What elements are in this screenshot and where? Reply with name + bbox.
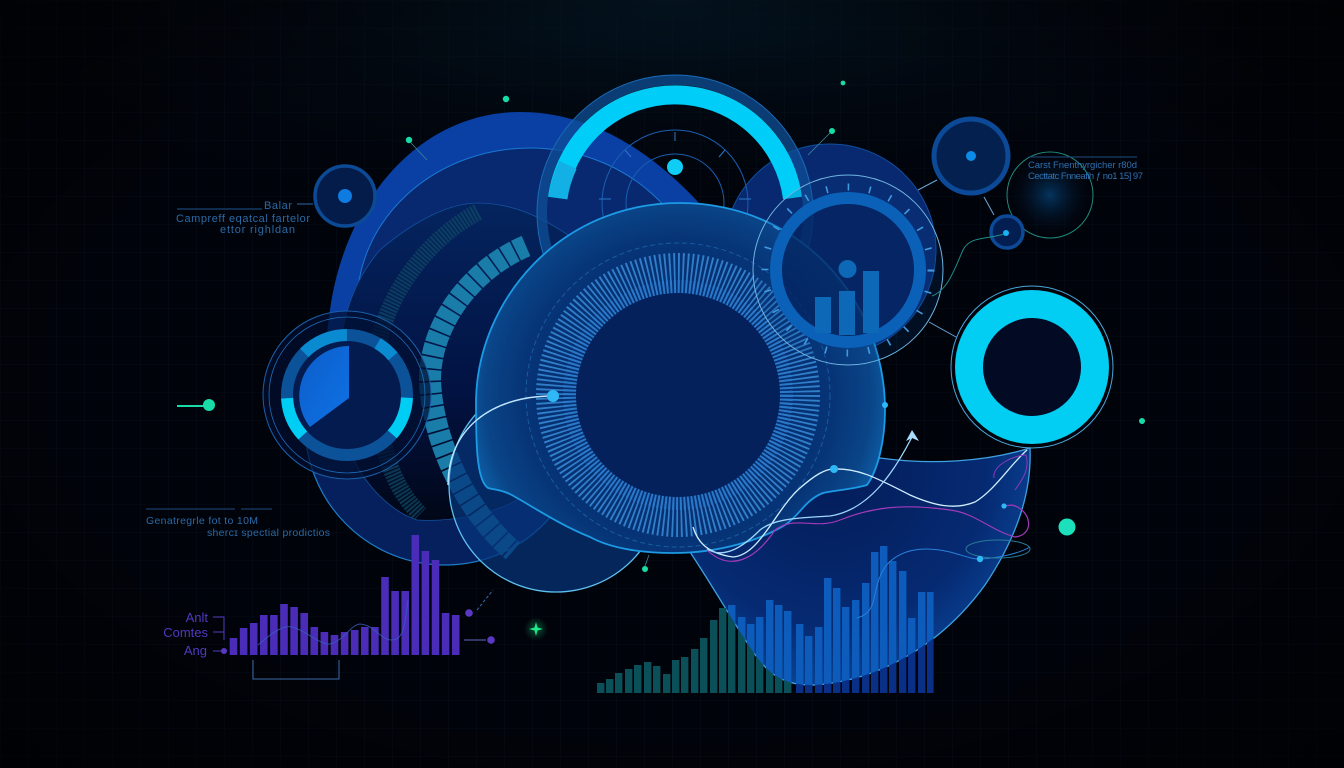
top right caption: Cecttatc Fnneafih ƒ no1 15] 97 bbox=[1028, 171, 1143, 182]
top right node bbox=[918, 119, 1008, 215]
blob curves bbox=[448, 396, 1030, 618]
bottom left caption bbox=[146, 509, 330, 539]
back crescent shapes bbox=[305, 112, 703, 565]
left pie dial bbox=[262, 310, 432, 480]
central radial dial bbox=[476, 203, 885, 553]
top left caption: Campreff eqatcal fartelor bbox=[176, 213, 310, 225]
small linked node bbox=[929, 216, 1023, 337]
top left small node bbox=[297, 166, 375, 226]
chart axis labels: Anlt bbox=[186, 610, 208, 625]
translucent lower lobe bbox=[449, 378, 663, 592]
chart axis labels: Comtes bbox=[163, 625, 208, 640]
top left caption: ettor righldan bbox=[220, 224, 295, 236]
top left caption: Balar bbox=[264, 200, 292, 212]
purple bar chart bbox=[230, 535, 460, 655]
bottom right translucent blob bbox=[690, 448, 1030, 685]
curve markers bbox=[547, 390, 1007, 562]
faint striped arc bbox=[377, 212, 478, 514]
blue bar chart bbox=[796, 546, 934, 693]
green sparkle bbox=[524, 617, 548, 641]
top right caption: Carst Fnenthyrgicher r80d bbox=[1028, 160, 1137, 171]
top right caption bbox=[1028, 157, 1143, 182]
top left caption bbox=[176, 200, 310, 236]
purple chart bracket bbox=[253, 660, 339, 679]
label ticks bbox=[213, 617, 224, 651]
bars seen through the blob bbox=[728, 546, 934, 693]
purple chart trend line bbox=[258, 600, 408, 645]
purple chart markers bbox=[221, 590, 495, 654]
green bar chart bbox=[597, 600, 791, 693]
right chart dial bbox=[753, 175, 943, 365]
chart axis labels bbox=[163, 610, 208, 658]
arrow head bbox=[906, 430, 919, 441]
bright striped arc bbox=[430, 246, 526, 551]
right cyan ring bbox=[951, 286, 1113, 448]
green outlined circle bbox=[1007, 152, 1093, 238]
bottom left caption: Genatregrle fot to 10M bbox=[146, 515, 258, 527]
green accent nodes bbox=[177, 81, 1145, 572]
chart axis labels: Ang bbox=[184, 643, 207, 658]
right background disc bbox=[724, 144, 936, 356]
bottom left caption: shercɪ spectial prodictios bbox=[207, 527, 330, 539]
top gauge bbox=[537, 75, 813, 351]
